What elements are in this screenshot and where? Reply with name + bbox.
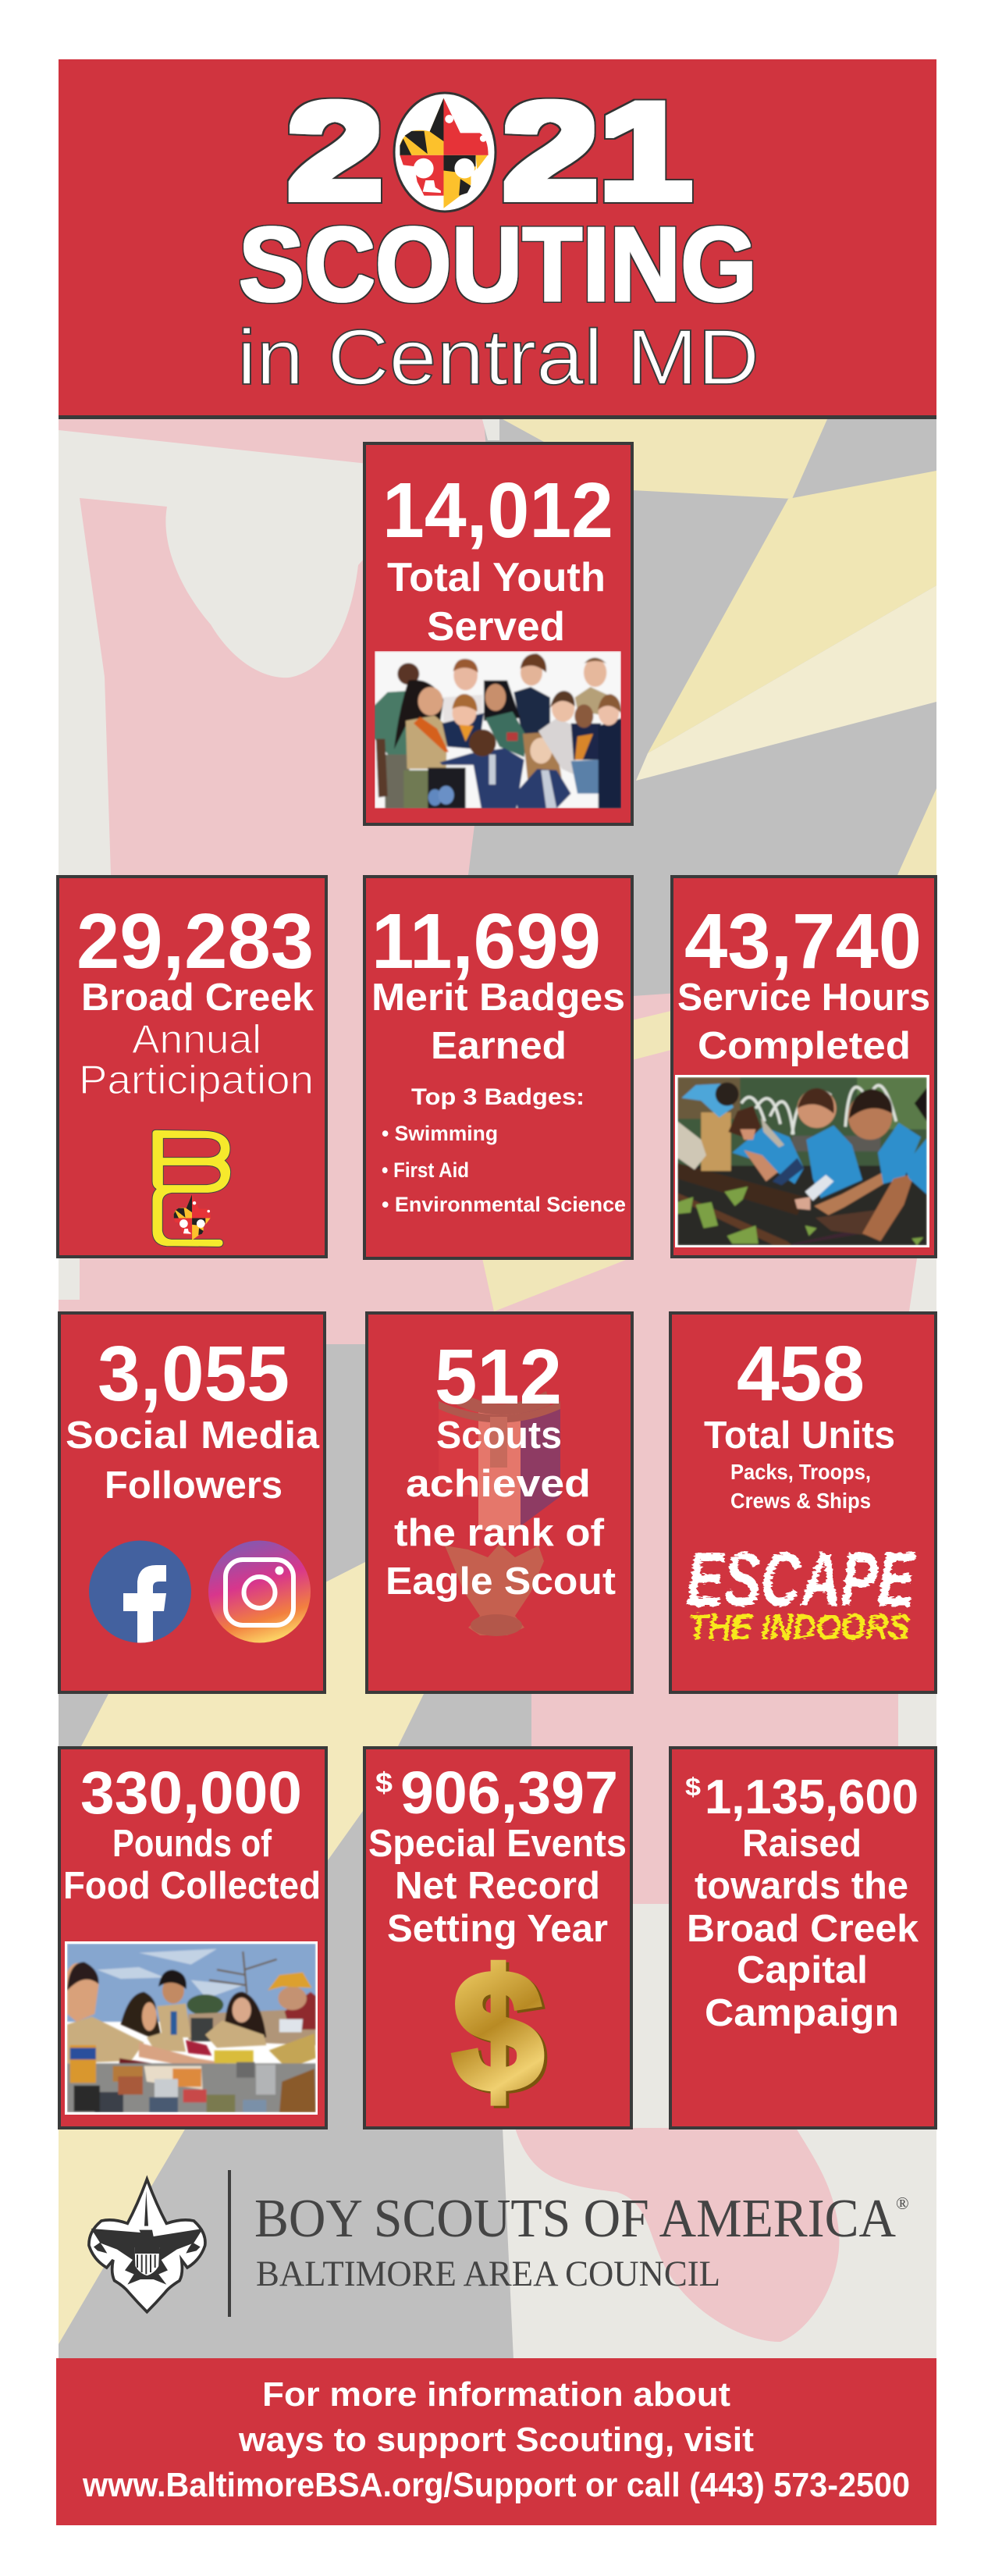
panel: total youth served: Served: [427, 604, 565, 649]
logo: Boy Scouts of America: ®: [896, 2194, 909, 2213]
footer banner: ways to support Scouting, visit: [238, 2421, 754, 2459]
panel: service hours: 43,740: [684, 898, 922, 985]
panel: special events: Special Events: [368, 1823, 627, 1865]
panel: social media followers: Followers: [105, 1464, 283, 1507]
panel: Broad Creek participation: Participation: [79, 1058, 314, 1103]
panel: total units: 458: [737, 1330, 865, 1418]
photo: scouts gardening: [675, 1075, 929, 1247]
panel: merit badges: Top 3 Badges:: [411, 1084, 585, 1110]
icon: Broad Creek BC logo: [152, 1130, 231, 1247]
title: 2021: 2: [286, 76, 384, 228]
title: SCOUTING: SCOUTING: [239, 205, 757, 323]
panel: special events: $: [375, 1767, 393, 1799]
panel: total units: [670, 1313, 936, 1692]
icon: Eagle Scout medal: [439, 1391, 560, 1636]
panel: Broad Creek participation: Annual: [132, 1017, 261, 1062]
panel: merit badges: Earned: [431, 1025, 567, 1067]
logo: Escape the Indoors: THE INDOORS: [688, 1606, 910, 1647]
panel: total youth served: [364, 443, 632, 824]
panel: capital campaign: Broad Creek: [687, 1908, 919, 1950]
panel: food collected: 330,000: [80, 1759, 302, 1827]
panel: capital campaign: [670, 1748, 936, 2128]
panel: social media followers: Social Media: [66, 1414, 320, 1457]
panel: service hours: Service Hours: [677, 977, 930, 1019]
panel: total units: Packs, Troops,: [730, 1460, 871, 1484]
panel: merit badges: Merit Badges: [371, 977, 625, 1019]
panel: Eagle Scout: 512: [435, 1333, 562, 1421]
panel: total youth served: Total Youth: [387, 555, 606, 600]
title: 2021: 2: [502, 76, 599, 228]
photo: group of scouts: [375, 651, 621, 809]
icon: fleur-de-lis Maryland flag oval: [394, 93, 496, 212]
logo: Escape the Indoors: [687, 1536, 916, 1647]
panel: social media followers: [59, 1313, 325, 1692]
panel: food collected: Pounds of: [112, 1823, 272, 1865]
footer banner: [56, 2358, 936, 2525]
list: top 3 badges: • First Aid: [382, 1158, 469, 1182]
panel: special events: 906,397: [400, 1759, 618, 1827]
panel: capital campaign: Campaign: [705, 1992, 899, 2034]
footer banner: www.BaltimoreBSA.org/Support or call (443) 573-2500: [82, 2466, 910, 2504]
photo: scouts sorting food: [65, 1941, 318, 2115]
subtitle: in Central MD: in Central MD: [237, 314, 759, 401]
panel: capital campaign: Raised: [742, 1823, 862, 1865]
icon: BSA fleur-de-lis: [89, 2179, 205, 2312]
panel: Eagle Scout: achieved: [406, 1463, 591, 1505]
panel: Eagle Scout: Scouts: [436, 1414, 562, 1457]
panel: capital campaign: $: [685, 1773, 701, 1801]
icon: Facebook: [89, 1541, 191, 1647]
panel: capital campaign: 1,135,600: [705, 1770, 919, 1824]
list: top 3 badges: [382, 1122, 626, 1216]
panel: service hours: Completed: [698, 1025, 911, 1067]
panel: total youth served: 14,012: [382, 467, 613, 554]
panel: Broad Creek participation: Broad Creek: [81, 977, 314, 1019]
panel: Broad Creek participation: 29,283: [76, 898, 314, 985]
panel: total units: Crews & Ships: [730, 1489, 871, 1513]
header banner: [59, 59, 936, 419]
panel: food collected: Food Collected: [63, 1865, 321, 1907]
panel: Broad Creek participation: [58, 877, 326, 1257]
panel: capital campaign: Capital: [737, 1949, 868, 1991]
background: faded Maryland flag: [59, 419, 936, 2362]
panel: special events: [364, 1748, 631, 2128]
panel: total units: Total Units: [704, 1414, 895, 1457]
logo: Escape the Indoors: ESCAPE: [687, 1536, 916, 1622]
panel: food collected: [59, 1748, 326, 2128]
footer banner: For more information about: [262, 2375, 730, 2414]
panel: social media followers: 3,055: [98, 1330, 290, 1418]
logo: Boy Scouts of America: BOY SCOUTS OF AMERICA: [254, 2189, 896, 2249]
icon: Instagram: [208, 1541, 311, 1642]
panel: Eagle Scout: the rank of: [394, 1512, 605, 1554]
panel: capital campaign: towards the: [695, 1865, 908, 1907]
panel: special events: Setting Year: [387, 1908, 608, 1950]
panel: merit badges: [364, 877, 632, 1258]
list: top 3 badges: • Swimming: [382, 1122, 498, 1145]
panel: special events: Net Record: [395, 1865, 600, 1907]
panel: Eagle Scout: [367, 1313, 632, 1692]
title: 2021: 1: [598, 76, 693, 228]
list: top 3 badges: • Environmental Science: [382, 1193, 626, 1216]
icon: gold dollar sign: $: [453, 1937, 543, 2126]
panel: merit badges: 11,699: [371, 898, 601, 985]
panel: Eagle Scout: Eagle Scout: [386, 1560, 616, 1603]
logo: Boy Scouts of America: [89, 2170, 909, 2317]
logo: Boy Scouts of America: BALTIMORE AREA COUNCIL: [256, 2254, 720, 2294]
title: 2021: [286, 76, 693, 228]
panel: service hours: [672, 877, 936, 1257]
